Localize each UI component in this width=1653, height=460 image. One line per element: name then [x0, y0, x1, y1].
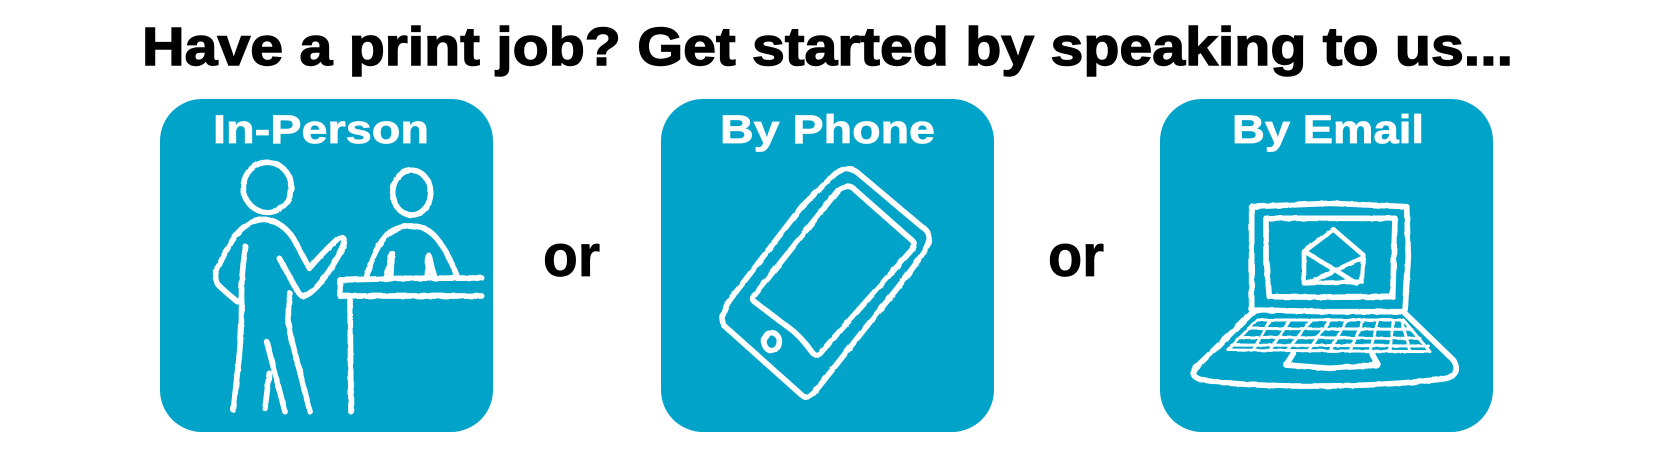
- icon: smartphone: [722, 169, 929, 397]
- panel: by phone: [661, 99, 994, 432]
- connector word: or: or: [1048, 223, 1104, 289]
- title: Have a print job? Get started by speaking to us...: [142, 17, 1513, 77]
- heading: by phone: By Phone: [720, 108, 935, 152]
- heading: in-person: In-Person: [213, 108, 429, 152]
- icon: person at a desk: [215, 162, 482, 412]
- panel: in-person: [160, 99, 493, 432]
- icon: laptop with envelope: [1193, 203, 1456, 386]
- panel: by email: [1160, 99, 1493, 432]
- heading: by email: By Email: [1232, 108, 1424, 152]
- connector word: or: or: [543, 223, 600, 289]
